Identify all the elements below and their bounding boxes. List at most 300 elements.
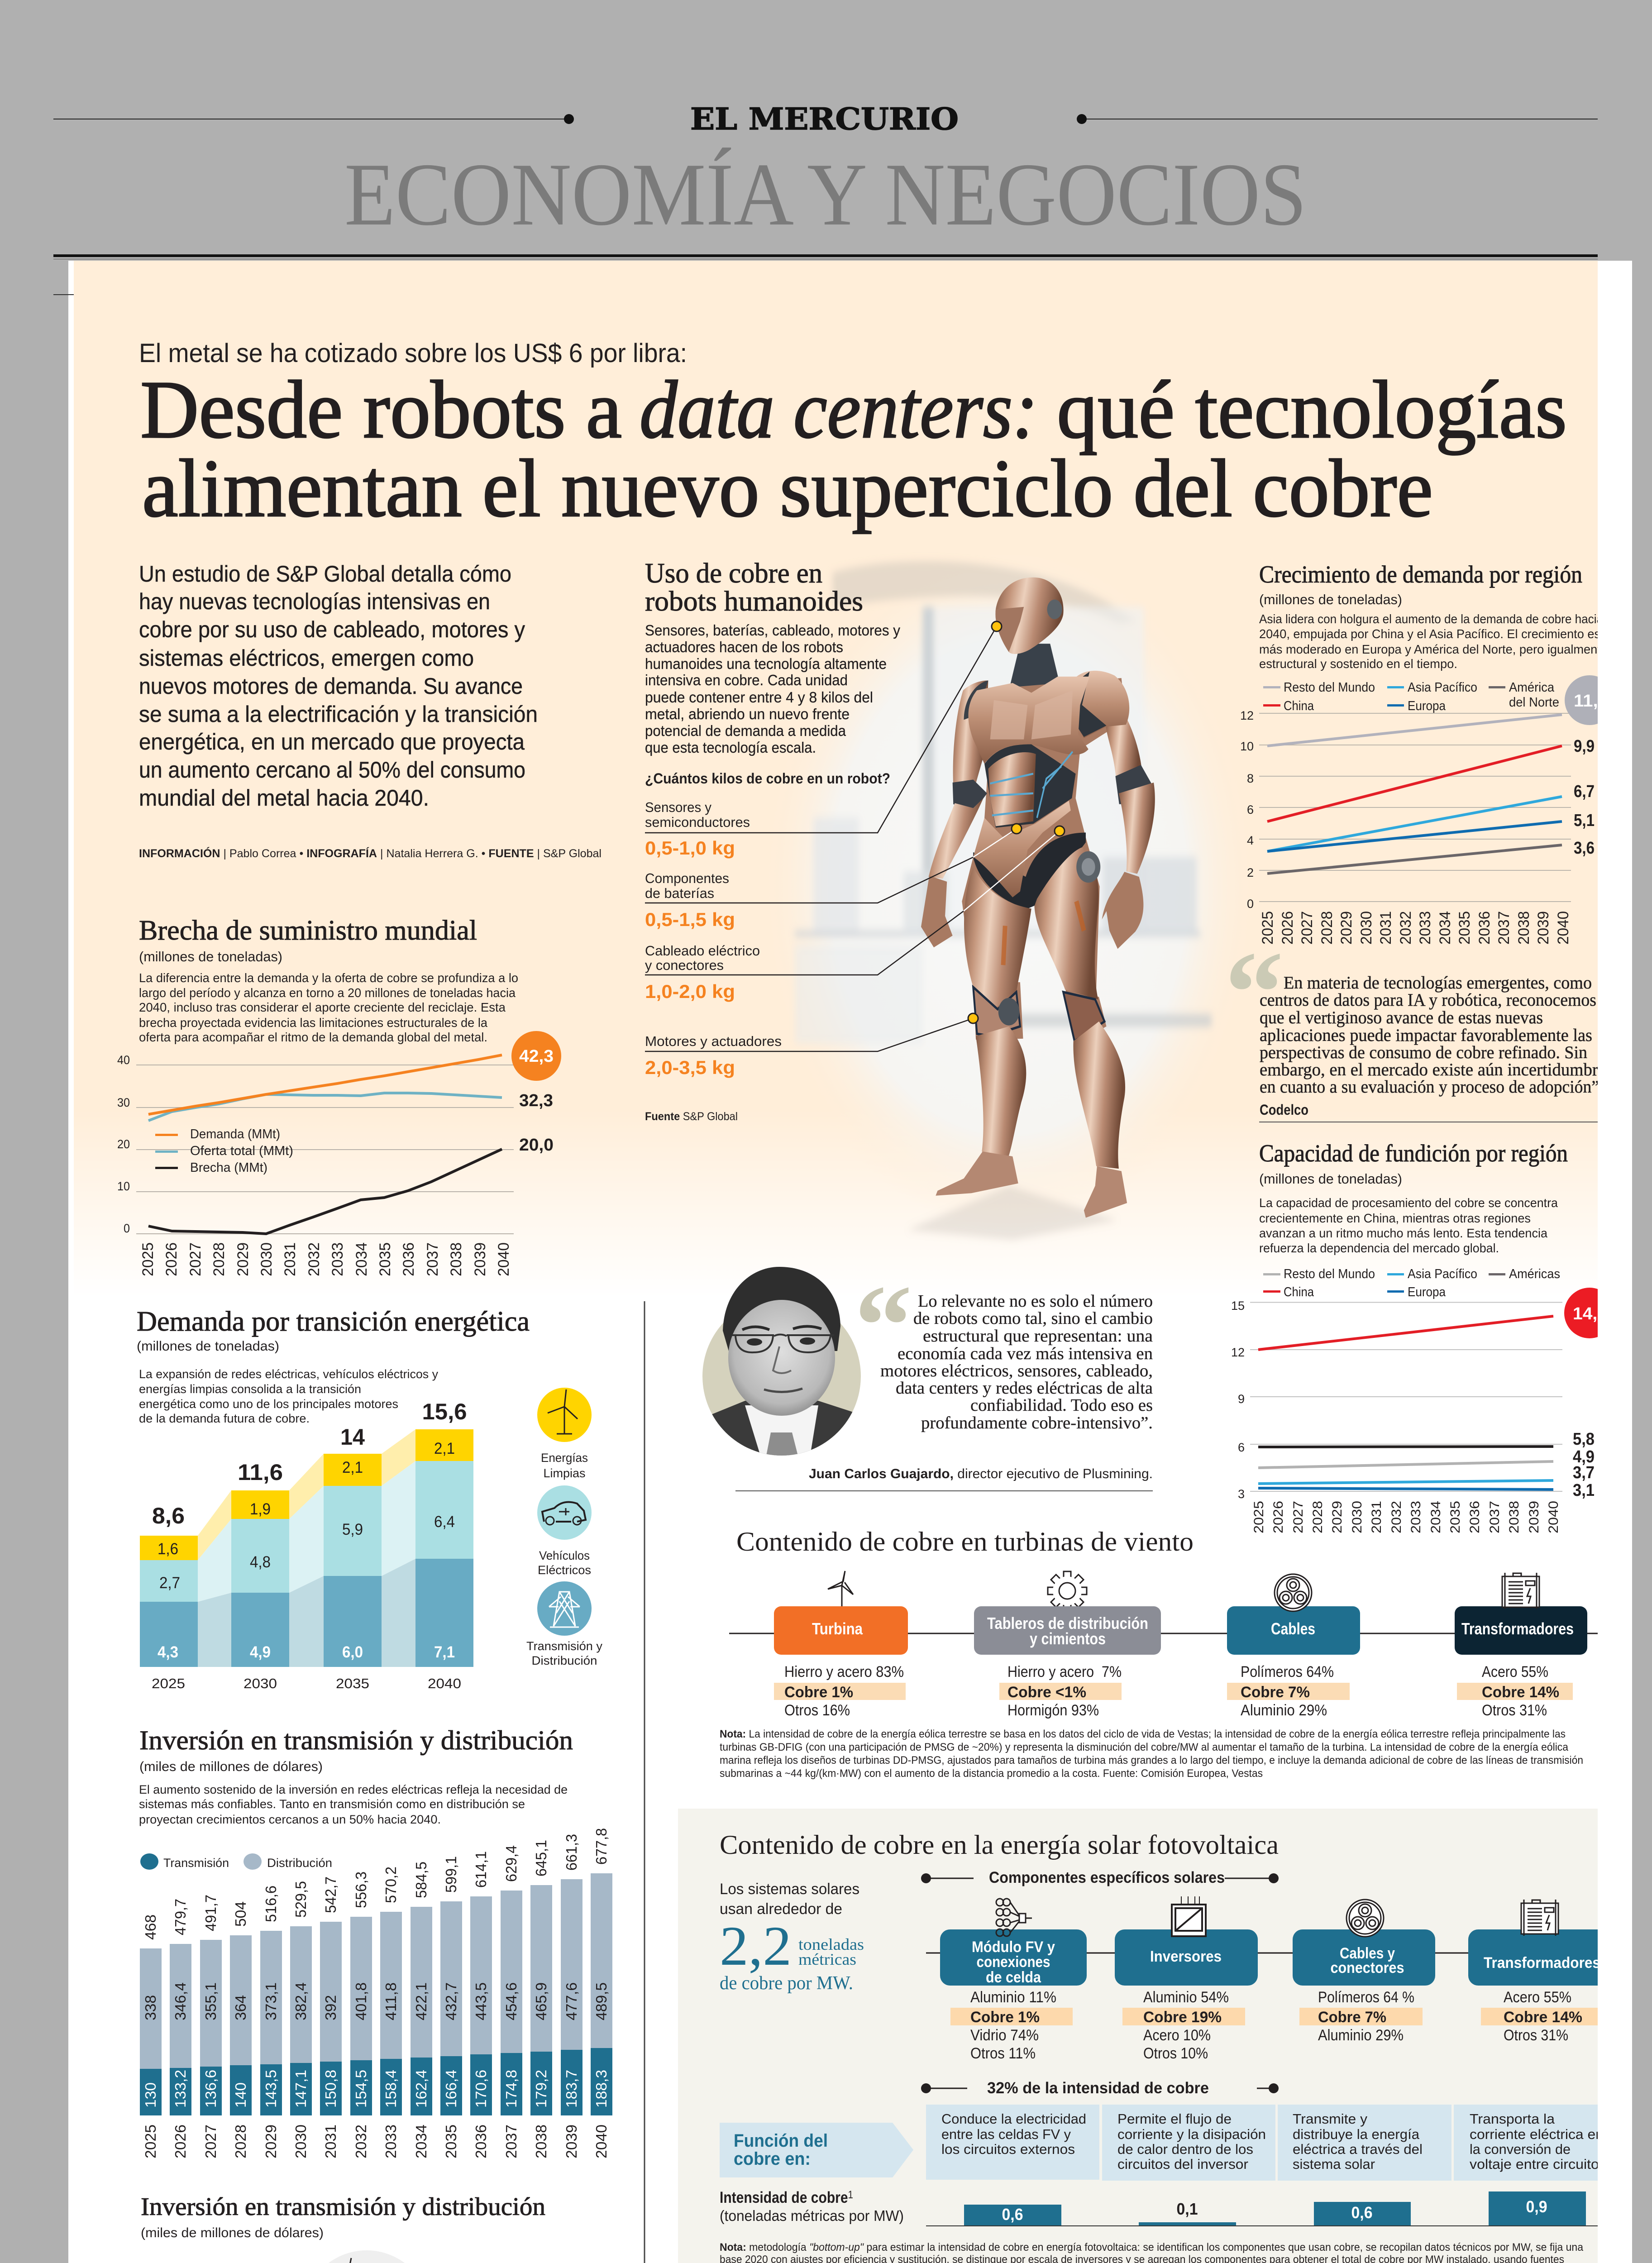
stacked bar chart: 584,5 — [413, 1862, 430, 1898]
stacked bar chart: 468 — [142, 1914, 159, 1940]
material shares: Cobre 1% — [970, 2009, 1040, 2026]
line chart: demand by region: 4 — [1247, 834, 1254, 847]
solar intro figure: métricas — [798, 1950, 856, 1968]
kicker: El metal se ha cotizado sobre los US$ 6 por libra: — [139, 339, 687, 368]
function cells: sistema solar — [1293, 2156, 1375, 2172]
stacked area bar chart: 6,0 — [342, 1643, 363, 1661]
box: cables and connectors: conectores — [1331, 1959, 1404, 1977]
stacked bar chart: 599,1 — [443, 1856, 459, 1893]
copper by component: Motores y actuadores — [645, 1033, 782, 1049]
line chart: demand by region — [1240, 675, 1614, 945]
line chart: smelting capacity: 2028 — [1310, 1501, 1325, 1533]
description — [1259, 1196, 1558, 1255]
panel: smelting capacity — [1231, 1140, 1615, 1533]
stacked bar chart: 477,6 — [563, 1982, 580, 2020]
stacked bar chart: 2028 — [232, 2125, 249, 2158]
robot description: que esta tecnología escala. — [645, 739, 816, 756]
stacked area bar chart: 5,9 — [342, 1521, 363, 1538]
intro text: sistemas eléctricos, emergen como — [139, 645, 474, 671]
line chart: supply gap: 2031 — [282, 1242, 299, 1276]
line chart: demand by region: 2029 — [1338, 911, 1355, 945]
demand value bubble — [511, 1031, 561, 1081]
note — [720, 1728, 1583, 1780]
line chart: smelting capacity: 15 — [1231, 1299, 1245, 1313]
robot description: puede contener entre 4 y 8 kilos del — [645, 689, 873, 706]
quote: Codelco: centros de datos para IA y robótica, reconocemos — [1260, 990, 1596, 1010]
line chart: smelting capacity: 3 — [1238, 1487, 1245, 1501]
bar chart: copper intensity: 0,9 — [1526, 2197, 1547, 2216]
stacked bar chart: 401,8 — [353, 1982, 369, 2020]
stacked bar chart: 2032 — [353, 2125, 369, 2158]
intro text — [139, 561, 538, 811]
quote: Guajardo: estructural que representan: una — [923, 1327, 1153, 1346]
stacked bar chart: 130 — [142, 2082, 159, 2108]
legend: Europa — [1408, 699, 1446, 713]
icon: clean energy — [537, 1388, 592, 1442]
stacked area bar chart: 2040 — [428, 1676, 461, 1691]
line chart: demand by region: 2028 — [1318, 911, 1336, 945]
quote: Guajardo: “ — [855, 1262, 912, 1389]
stacked bar chart: 133,2 — [172, 2070, 189, 2108]
heading: Crecimiento de demanda por región — [1259, 561, 1582, 588]
stacked bar chart: 183,7 — [563, 2070, 580, 2108]
copper by component: Componentes — [645, 870, 729, 886]
line chart: demand by region: 2030 — [1358, 911, 1375, 945]
panel: solar PV — [678, 1809, 1613, 2263]
rest of world bubble — [1565, 675, 1614, 725]
stacked area bar chart: 15,6 — [422, 1399, 467, 1424]
quote: Codelco: en cuanto a su evaluación y proceso de adopción” — [1260, 1077, 1599, 1097]
material shares: Cobre 7% — [1318, 2009, 1386, 2026]
box: PV module: Módulo FV y — [972, 1938, 1055, 1956]
stacked bar chart: 392 — [322, 1995, 339, 2020]
line chart: demand by region: 2032 — [1397, 911, 1414, 945]
box: transformers — [1455, 1606, 1587, 1655]
material shares: Otros 31% — [1482, 1702, 1547, 1719]
material shares: Hierro y acero 7% — [1007, 1663, 1122, 1681]
line chart: supply gap: 2026 — [163, 1242, 180, 1276]
subheading: copper intensity: 32% de la intensidad de cobre — [987, 2079, 1209, 2097]
main title — [140, 364, 1567, 534]
line chart: demand by region: 6,7 — [1574, 782, 1595, 801]
material shares: Polímeros 64 % — [1318, 1989, 1414, 2006]
blurred office background — [761, 543, 1256, 1240]
note: Nota: La intensidad de cobre de la energía eólica terrestre se basa en los datos del ciclo de vida de Vestas; la intensidad de cobre de la energía eólica terrestre refleja principalmente las — [720, 1728, 1566, 1740]
stacked bar chart: 465,9 — [533, 1982, 549, 2020]
line chart: smelting capacity: 2035 — [1448, 1501, 1463, 1533]
stacked bar chart: 136,6 — [202, 2070, 219, 2108]
solar intro figure: Los sistemas solares — [720, 1881, 859, 1898]
panel: supply gap — [117, 915, 561, 1276]
intro text: energética, en un mercado que proyecta — [139, 729, 525, 754]
icon: cable — [1275, 1574, 1312, 1611]
line chart: smelting capacity: 9 — [1238, 1392, 1245, 1406]
quote: Guajardo: data centers y redes eléctricas de alta — [896, 1379, 1153, 1398]
line chart: supply gap: 2028 — [210, 1242, 228, 1276]
material shares: Polímeros 64% — [1241, 1663, 1334, 1681]
intro text: Un estudio de S&P Global detalla cómo — [139, 561, 511, 587]
intro text: cobre por su uso de cableado, motores y — [139, 617, 525, 642]
stacked bar chart: 443,5 — [473, 1982, 489, 2020]
box: cables — [1227, 1606, 1360, 1655]
line chart: demand by region: 8 — [1247, 772, 1254, 785]
copper by component: 0,5-1,5 kg — [645, 909, 735, 930]
stacked bar chart: 661,3 — [563, 1834, 580, 1871]
stacked bar chart: 143,5 — [263, 2070, 279, 2108]
panel: energy transition demand: Distribución — [531, 1654, 597, 1667]
robot description: intensiva en cobre. Cada unidad — [645, 672, 848, 688]
copper by component: 1,0-2,0 kg — [645, 981, 735, 1002]
line chart: smelting capacity: 3,7 — [1573, 1463, 1595, 1482]
legend: Demanda (MMt) — [190, 1127, 280, 1141]
note: turbinas GB-DFIG (con una participación de PMSG de ~20%) y representa la disminución del cobre/MW al aumentar el tamaño de la turbina. La intensidad de cobre de la energía eólica — [720, 1741, 1569, 1753]
quote: Codelco: que el vertiginoso avance de estas nuevas — [1260, 1008, 1543, 1027]
description: oferta para acompañar el ritmo de la demanda global del metal. — [139, 1030, 487, 1044]
quote: Codelco: aplicaciones puede impactar favorablemente las — [1260, 1026, 1592, 1045]
note: marina refleja los diseños de turbinas DD-PMSG, ajustados para tamaños de turbina más grandes a lo largo del tiempo, e incluye la demanda adicional de cobre de las líneas de transmisión — [720, 1754, 1583, 1766]
stacked bar chart: 556,3 — [353, 1872, 369, 1908]
material shares: Acero 55% — [1504, 1989, 1571, 2006]
quote: Codelco: perspectivas de consumo de cobre refinado. Sin — [1260, 1043, 1587, 1062]
material shares: Otros 10% — [1143, 2045, 1208, 2062]
heading: Brecha de suministro mundial — [139, 915, 477, 946]
quote: Guajardo: Lo relevante no es solo el número — [918, 1292, 1153, 1311]
line chart: smelting capacity: 2039 — [1527, 1501, 1542, 1533]
line chart: smelting capacity: 2037 — [1487, 1501, 1502, 1533]
quote: Codelco: “ — [1225, 927, 1284, 1058]
box: cables and connectors — [1293, 1929, 1435, 1986]
main title: alimentan el nuevo superciclo del cobre — [142, 443, 1433, 534]
stacked bar chart: 170,6 — [473, 2070, 489, 2108]
description: 2040, incluso tras considerar el aporte creciente del reciclaje. Esta — [139, 1000, 506, 1014]
panel: energy transition demand — [137, 1306, 602, 1691]
main title: data centers: — [640, 364, 1038, 455]
line chart: demand by region: 2034 — [1437, 911, 1454, 945]
stacked area bar chart: 2,1 — [342, 1459, 363, 1476]
line chart: supply gap: 10 — [117, 1179, 130, 1193]
box: turbine: Turbina — [812, 1619, 863, 1638]
line chart: smelting capacity: 2025 — [1251, 1501, 1266, 1533]
bar chart: copper intensity: 0,1 — [1177, 2200, 1198, 2218]
function cells: Transporta la — [1470, 2111, 1555, 2127]
stacked bar chart: 2027 — [202, 2125, 219, 2158]
legend: Distribución — [267, 1856, 332, 1870]
panel: grid investment chart — [139, 1725, 612, 2158]
function cells: eléctrica a través del — [1293, 2141, 1423, 2157]
description: Asia lidera con holgura el aumento de la demanda de cobre hacia — [1259, 612, 1603, 626]
description: La capacidad de procesamiento del cobre se concentra — [1259, 1196, 1558, 1210]
quote: Guajardo: confiabilidad. Todo eso es — [970, 1396, 1153, 1415]
material shares: Cobre <1% — [1007, 1684, 1086, 1701]
line chart: demand by region: 10 — [1240, 740, 1254, 753]
line chart: supply gap: 2034 — [353, 1242, 370, 1276]
copper by component — [645, 799, 782, 1123]
callout lines — [645, 621, 1065, 1051]
line chart: demand by region: 2035 — [1456, 911, 1473, 945]
robot description: Uso de cobre en — [645, 558, 822, 589]
box: cables and connectors: Cables y — [1340, 1945, 1395, 1962]
bar chart: copper intensity: 1 — [848, 2189, 853, 2201]
box: cables: Cables — [1271, 1619, 1315, 1638]
node: generation — [177, 2250, 429, 2263]
stacked area bar chart: 4,3 — [158, 1643, 178, 1661]
material shares: Otros 31% — [1504, 2027, 1568, 2044]
line chart: supply gap: 2038 — [448, 1242, 465, 1276]
function cells: la conversión de — [1470, 2141, 1571, 2157]
panel: wind turbines — [720, 1527, 1598, 1780]
line chart: demand by region: 2039 — [1535, 911, 1552, 945]
icon: gear — [1048, 1571, 1087, 1610]
line chart: smelting capacity: 2033 — [1408, 1501, 1423, 1533]
stacked bar chart: 2037 — [503, 2125, 520, 2158]
stacked area bar chart: 4,9 — [250, 1643, 271, 1661]
stacked bar chart: 645,1 — [533, 1840, 549, 1876]
line chart: smelting capacity: 5,8 — [1573, 1430, 1595, 1449]
legend: Transmisión — [163, 1856, 229, 1870]
box: transformers: Transformadores — [1461, 1619, 1574, 1638]
newspaper name: EL MERCURIO — [690, 101, 959, 137]
line chart: supply gap: 2030 — [258, 1242, 275, 1276]
stacked bar chart: 489,5 — [593, 1982, 610, 2020]
stacked bar chart: 629,4 — [503, 1845, 520, 1882]
line chart: smelting capacity: 2032 — [1389, 1501, 1404, 1533]
intro text: mundial del metal hacia 2040. — [139, 785, 429, 811]
material shares: Otros 16% — [784, 1702, 850, 1719]
function arrow: cobre en: — [734, 2149, 811, 2169]
rest of world bubble: 11,9 — [1574, 692, 1608, 711]
stacked area bar chart: 2,1 — [434, 1440, 455, 1457]
legend: América — [1509, 680, 1555, 695]
credits: INFORMACIÓN | Pablo Correa • INFOGRAFÍA | Natalia Herrera G. • FUENTE | S&P Global — [139, 846, 602, 860]
copper by component: de baterías — [645, 885, 714, 901]
box: transformers — [1468, 1929, 1613, 1986]
stacked bar chart: 158,4 — [382, 2070, 399, 2108]
robot description: robots humanoides — [645, 586, 863, 617]
quote: Guajardo: economía cada vez más intensiva en — [898, 1344, 1153, 1363]
panel: grid investment chart: (miles de millones de dólares) — [139, 1759, 323, 1774]
line chart: smelting capacity: 2030 — [1350, 1501, 1365, 1533]
stacked bar chart: 422,1 — [413, 1982, 430, 2020]
legend — [1263, 1267, 1560, 1299]
description: más moderado en Europa y América del Norte, pero igualmente — [1259, 642, 1608, 656]
material shares: Otros 11% — [970, 2045, 1036, 2062]
description: El aumento sostenido de la inversión en redes eléctricas refleja la necesidad de — [139, 1783, 568, 1796]
material shares: Vidrio 74% — [970, 2027, 1039, 2044]
stacked bar chart: 411,8 — [382, 1982, 399, 2020]
line chart: smelting capacity: 2040 — [1546, 1501, 1561, 1533]
legend: del Norte — [1509, 695, 1559, 710]
icon: turbine — [828, 1571, 853, 1608]
material shares — [774, 1663, 1573, 1719]
panel: demand by region: (millones de toneladas) — [1259, 592, 1402, 607]
stacked bar chart: 150,8 — [322, 2070, 339, 2108]
material shares: Aluminio 54% — [1143, 1989, 1229, 2006]
heading: Demanda por transición energética — [137, 1306, 530, 1337]
box: inverters — [1115, 1929, 1258, 1986]
function arrow — [720, 2123, 913, 2177]
material shares: Cobre 1% — [784, 1684, 853, 1701]
box: inverters: Inversores — [1150, 1948, 1222, 1965]
quote: Guajardo: profundamente cobre-intensivo”. — [921, 1413, 1153, 1432]
copper by component: semiconductores — [645, 814, 750, 830]
description: energética como uno de los principales motores — [139, 1397, 398, 1411]
legend — [140, 1853, 332, 1870]
stacked bar chart: 2026 — [172, 2125, 189, 2158]
stacked bar chart: 2040 — [593, 2125, 610, 2158]
line chart: demand by region: 2031 — [1377, 911, 1394, 945]
description: proyectan crecimientos cercanos a un 50% hacia 2040. — [139, 1813, 441, 1826]
solar intro figure: de cobre por MW. — [720, 1973, 853, 1994]
material shares: Cobre 7% — [1241, 1684, 1310, 1701]
icon: transformer — [1502, 1573, 1539, 1609]
intro text: un aumento cercano al 50% del consumo — [139, 757, 525, 783]
line chart: smelting capacity: 4,9 — [1573, 1447, 1595, 1466]
stacked area bar chart: 1,6 — [158, 1540, 178, 1558]
stacked bar chart: 188,3 — [593, 2070, 610, 2108]
function cells: corriente y la disipación — [1117, 2126, 1266, 2142]
box: switchboards: y cimientos — [1030, 1629, 1106, 1648]
description — [1259, 612, 1608, 671]
robot description: metal, abriendo un nuevo frente — [645, 706, 850, 722]
legend: Resto del Mundo — [1284, 1267, 1375, 1281]
box: switchboards: Tableros de distribución — [987, 1614, 1148, 1633]
stacked area bar chart: 2030 — [244, 1676, 277, 1691]
bar chart: copper intensity: Intensidad de cobre — [720, 2189, 869, 2206]
copper by component: Sensores y — [645, 799, 711, 815]
line chart: demand by region: 5,1 — [1574, 811, 1595, 830]
function cells: Permite el flujo de — [1117, 2111, 1232, 2127]
function cells: entre las celdas FV y — [941, 2126, 1071, 2142]
stacked bar chart: 2030 — [292, 2125, 309, 2158]
line chart: smelting capacity: 2036 — [1467, 1501, 1482, 1533]
icon: inverter — [1172, 1896, 1206, 1936]
description — [139, 1367, 438, 1425]
stacked area bar chart: 8,6 — [152, 1503, 185, 1528]
stacked bar chart: 516,6 — [263, 1886, 279, 1922]
description: avanzan a un ritmo mucho más lento. Esta tendencia — [1259, 1226, 1547, 1240]
stacked bar chart: 614,1 — [473, 1851, 489, 1888]
stacked area bar chart: 14 — [340, 1424, 365, 1450]
stacked area bar chart: 2025 — [152, 1676, 185, 1691]
panel: energy transition demand: Transmisión y — [526, 1639, 602, 1653]
legend: Asia Pacífico — [1408, 680, 1477, 695]
bar chart: copper intensity: (toneladas métricas por MW) — [720, 2207, 904, 2224]
legend: Europa — [1408, 1285, 1446, 1299]
intro text: hay nuevas tecnologías intensivas en — [139, 589, 490, 614]
line chart: supply gap: 2039 — [472, 1242, 489, 1276]
material shares: Acero 10% — [1143, 2027, 1211, 2044]
stacked bar chart: 2025 — [142, 2125, 159, 2158]
function cells: corriente eléctrica en — [1470, 2126, 1604, 2142]
function cells: Transmite y — [1293, 2111, 1367, 2127]
stacked bar chart: 677,8 — [593, 1828, 610, 1865]
line chart: supply gap: 0 — [124, 1222, 130, 1235]
line chart: demand by region: 2036 — [1476, 911, 1493, 945]
line chart: smelting capacity: 2031 — [1369, 1501, 1384, 1533]
legend: Asia Pacífico — [1408, 1267, 1477, 1281]
robot description: ¿Cuántos kilos de cobre en un robot? — [645, 770, 890, 787]
line chart: supply gap: 2036 — [400, 1242, 417, 1276]
main title: qué tecnologías — [1057, 364, 1567, 455]
panel: grid flow diagram: (miles de millones de dólares) — [141, 2225, 324, 2240]
bar chart: copper intensity: 0,6 — [1351, 2203, 1372, 2222]
quote: Codelco: Codelco — [1260, 1102, 1308, 1118]
bar chart: copper intensity — [720, 2189, 1598, 2226]
legend: China — [1284, 699, 1314, 713]
stacked bar chart: 2038 — [533, 2125, 549, 2158]
box: turbine — [774, 1606, 908, 1655]
line chart: supply gap: 32,3 — [519, 1091, 553, 1110]
solar intro figure — [720, 1881, 864, 1994]
description: 2040, empujada por China y el Asia Pacífico. El crecimiento es — [1259, 627, 1600, 641]
description: estructural y sostenido en el tiempo. — [1259, 657, 1457, 671]
line chart: smelting capacity: 12 — [1231, 1346, 1245, 1359]
line chart: supply gap: 2025 — [139, 1242, 157, 1276]
stacked area bar chart: 1,9 — [250, 1500, 271, 1518]
stacked bar chart: 504 — [232, 1901, 249, 1927]
description: energías limpias consolida a la transición — [139, 1382, 361, 1396]
heading: Inversión en transmisión y distribución — [139, 1725, 573, 1755]
line chart: demand by region: 9,9 — [1574, 737, 1595, 756]
copper by component: Cableado eléctrico — [645, 943, 760, 959]
demand value bubble: 42,3 — [519, 1047, 554, 1066]
box: PV module — [940, 1929, 1087, 1986]
material shares: Cobre 14% — [1504, 2009, 1582, 2026]
function cells: de calor dentro de los — [1117, 2141, 1253, 2157]
section name: ECONOMÍA Y NEGOCIOS — [344, 145, 1307, 244]
panel: energy transition demand: Energías — [541, 1451, 588, 1465]
function cells: Conduce la electricidad — [941, 2111, 1086, 2127]
line chart: demand by region: 2026 — [1279, 911, 1296, 945]
quote: Guajardo: motores eléctricos, sensores, cableado, — [880, 1361, 1153, 1380]
heading: Contenido de cobre en turbinas de viento — [736, 1527, 1194, 1556]
line chart: smelting capacity: 2026 — [1271, 1501, 1286, 1533]
legend: Oferta total (MMt) — [190, 1144, 293, 1158]
copper by component: y conectores — [645, 957, 724, 973]
robot description: actuadores hacen de los robots — [645, 639, 843, 655]
note — [720, 2241, 1584, 2263]
robot description: Sensores, baterías, cableado, motores y — [645, 622, 900, 639]
stacked bar chart: 373,1 — [263, 1982, 279, 2020]
line chart: demand by region: 2038 — [1515, 911, 1533, 945]
panel: energy transition demand: Limpias — [543, 1466, 586, 1480]
stacked bar chart: 338 — [142, 1995, 159, 2020]
line chart: supply gap: 2035 — [377, 1242, 394, 1276]
line chart: demand by region: 2027 — [1299, 911, 1316, 945]
line chart: smelting capacity: 2034 — [1428, 1501, 1443, 1533]
stacked bar chart: 364 — [232, 1995, 249, 2020]
material shares: Cobre 19% — [1143, 2009, 1222, 2026]
material shares — [950, 1989, 1598, 2062]
legend: Brecha (MMt) — [190, 1160, 267, 1175]
quote: Codelco — [1225, 927, 1606, 1122]
function cells: distribuye la energía — [1293, 2126, 1420, 2142]
line chart: smelting capacity: 2038 — [1507, 1501, 1522, 1533]
line chart: demand by region: 12 — [1240, 709, 1254, 722]
stacked area bar chart: 6,4 — [434, 1513, 455, 1531]
subheading: solar components: Componentes específicos solares — [989, 1869, 1225, 1886]
legend — [1263, 680, 1559, 713]
quote: Codelco: En materia de tecnologías emergentes, como — [1284, 973, 1592, 993]
robot description — [645, 558, 900, 787]
stacked bar chart: 140 — [232, 2082, 249, 2108]
heading: Contenido de cobre en la energía solar fotovoltaica — [720, 1830, 1279, 1860]
legend — [155, 1127, 293, 1175]
intro text: se suma a la electrificación y la transición — [139, 702, 538, 727]
line chart: supply gap: 2040 — [495, 1242, 512, 1276]
line chart: smelting capacity — [1231, 1288, 1615, 1533]
subheading: copper intensity — [921, 2079, 1279, 2097]
